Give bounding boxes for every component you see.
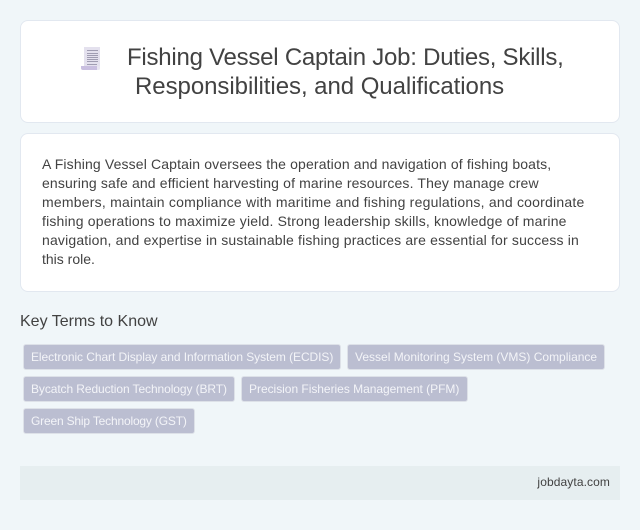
panel: title card — [20, 20, 620, 123]
tag: ECDIS: Electronic Chart Display and Information System (ECDIS) — [31, 350, 333, 364]
tag: VMS: Vessel Monitoring System (VMS) Compliance — [355, 350, 597, 364]
heading: key terms: Key Terms to Know — [20, 313, 158, 330]
description text: members, maintain compliance with maritime and fishing regulations, and coordinate — [42, 194, 585, 210]
description text: navigation, and expertise in sustainable fishing practices are essential for success in — [42, 232, 579, 248]
tag: BRT: Bycatch Reduction Technology (BRT) — [31, 382, 227, 396]
description text — [42, 156, 585, 267]
footer bar — [20, 466, 620, 500]
description text: this role. — [42, 251, 95, 267]
footer text: jobdayta.com — [537, 475, 610, 489]
description text: ensuring safe and efficient harvesting of marine resources. They manage crew — [42, 175, 539, 191]
tag: GST — [23, 408, 195, 434]
icon: document scroll — [81, 47, 100, 70]
title: Responsibilities, and Qualifications — [135, 73, 504, 100]
title — [127, 44, 564, 100]
tag: GST: Green Ship Technology (GST) — [31, 414, 187, 428]
tag: ECDIS — [23, 344, 341, 370]
tag: VMS — [347, 344, 605, 370]
description text: A Fishing Vessel Captain oversees the operation and navigation of fishing boats, — [42, 156, 551, 172]
tag: PFM: Precision Fisheries Management (PFM) — [249, 382, 459, 396]
title: Fishing Vessel Captain Job: Duties, Skills, — [127, 44, 564, 71]
panel: key term tags — [23, 344, 605, 434]
panel: description card — [20, 133, 620, 292]
tag: PFM — [241, 376, 468, 402]
description text: fishing operations to maximize yield. Strong leadership skills, knowledge of marine — [42, 213, 567, 229]
tag: BRT — [23, 376, 235, 402]
